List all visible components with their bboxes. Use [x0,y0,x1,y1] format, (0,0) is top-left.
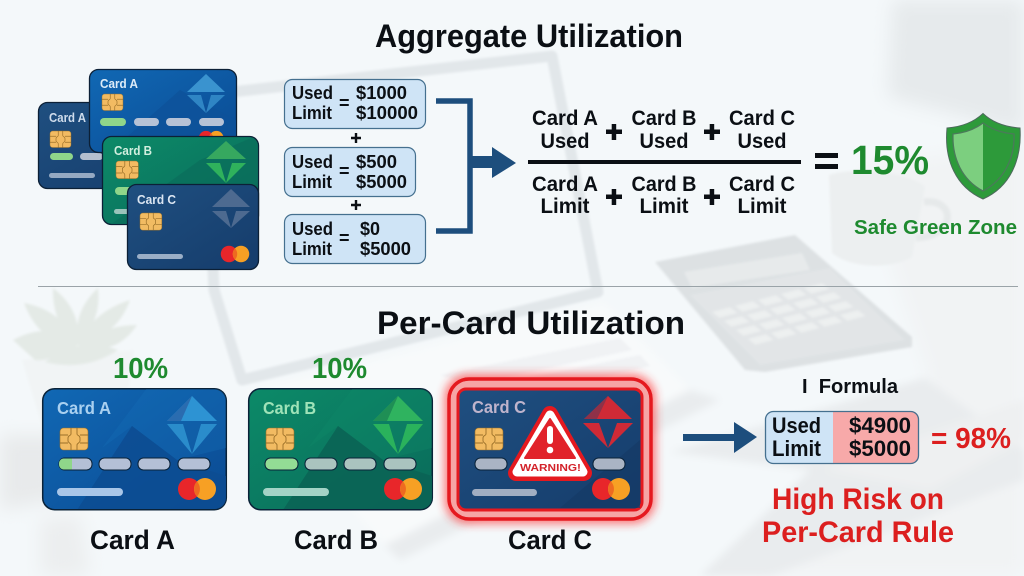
paper card photo [670,378,1024,576]
mug [829,171,925,266]
formula box: card C: Used [292,219,333,239]
formula box: card B: Used [292,152,333,172]
formula box: card C [284,214,426,264]
calculator [655,235,912,372]
formula box: card A: $10000 [356,103,418,123]
formula box: card C: $0 [360,219,380,239]
card: back card A navy [38,102,188,188]
title: per-card utilization: Per-Card Utilization [377,305,685,341]
label: card B: Card B [294,525,378,555]
aggregate fraction formula: Card B [632,173,696,196]
icon: warning triangle: WARNING! [520,462,581,474]
arrow: bracket into formula [436,101,516,231]
aggregate fraction formula: Card A [532,173,598,196]
card: navy card C [128,184,258,270]
formula box: card A [284,80,426,128]
aggregate fraction formula: Card A [532,107,598,130]
card: large card B: Card B [263,398,316,418]
title: aggregate utilization: Aggregate Utilization [375,18,683,54]
card: large card C with warning: Card C [472,397,526,417]
aggregate fraction formula: Used [640,130,688,153]
formula box: card C per-card: $4900 [849,413,911,438]
formula box: card C: = [339,228,350,248]
icon: green shield [947,114,1020,199]
card: large card A [43,388,226,510]
card: large card A: Card A [57,398,111,418]
card: blue card A [90,70,236,152]
formula box: card B: $500 [356,152,397,172]
formula box: card C per-card [765,411,919,464]
plus sign [351,200,361,210]
percentage: card B: 10% [312,353,367,385]
card: back card A navy: Card A [49,110,87,125]
formula box: card A: $1000 [356,83,407,103]
plant pot [22,350,134,445]
card: navy card C: Card C [137,192,177,207]
aggregate fraction formula: Limit [540,195,590,218]
formula box: card B: Limit [292,172,332,192]
callout: high risk: Per-Card Rule [762,516,954,549]
callout: high risk [762,483,954,549]
plant leaves [13,288,137,365]
icon: warning triangle [516,414,584,474]
aggregate fraction formula: Used [738,130,786,153]
card stack [38,70,258,270]
formula box: card C per-card: Limit [772,436,822,461]
aggregate fraction formula: Limit [640,195,688,218]
arrow: to card C formula [683,422,757,453]
label: safe green zone: Safe Green Zone [854,216,1017,239]
aggregate fraction formula: Card C [729,107,795,130]
formula box: card C: $5000 [360,239,411,259]
label: card A: Card A [90,525,175,555]
callout: high risk: High Risk on [772,483,944,516]
formula box: card C per-card: Used [772,413,821,438]
label: card C: Card C [508,525,592,555]
formula box: card C: Limit [292,239,332,259]
plus sign [351,133,361,143]
formula box: card C per-card: $5000 [849,436,911,461]
formula box: card A: Used [292,83,333,103]
formula box: card B: $5000 [356,172,407,192]
formula box: card A: Limit [292,103,332,123]
aggregate fraction formula: Used [540,130,590,153]
aggregate fraction formula: Limit [738,195,786,218]
result: 15%: 15% [851,137,929,183]
aggregate fraction formula [528,107,838,218]
laptop base [245,303,690,545]
percentage: card A: 10% [113,353,168,385]
card: green card B [102,135,258,225]
formula box: card B [284,148,416,196]
aggregate fraction formula: Card B [632,107,696,130]
card: large card B [249,388,432,510]
result: 98%: = 98% [931,423,1011,455]
card: blue card A: Card A [100,76,139,91]
aggregate fraction formula: Card C [729,173,795,196]
heading: formula: I Formula [802,376,899,398]
card: green card B: Card B [114,143,152,158]
formula box: card A: = [339,93,350,113]
laptop lid frame [205,56,598,380]
card: large card C with warning [444,374,656,524]
formula box: card B: = [339,161,350,181]
